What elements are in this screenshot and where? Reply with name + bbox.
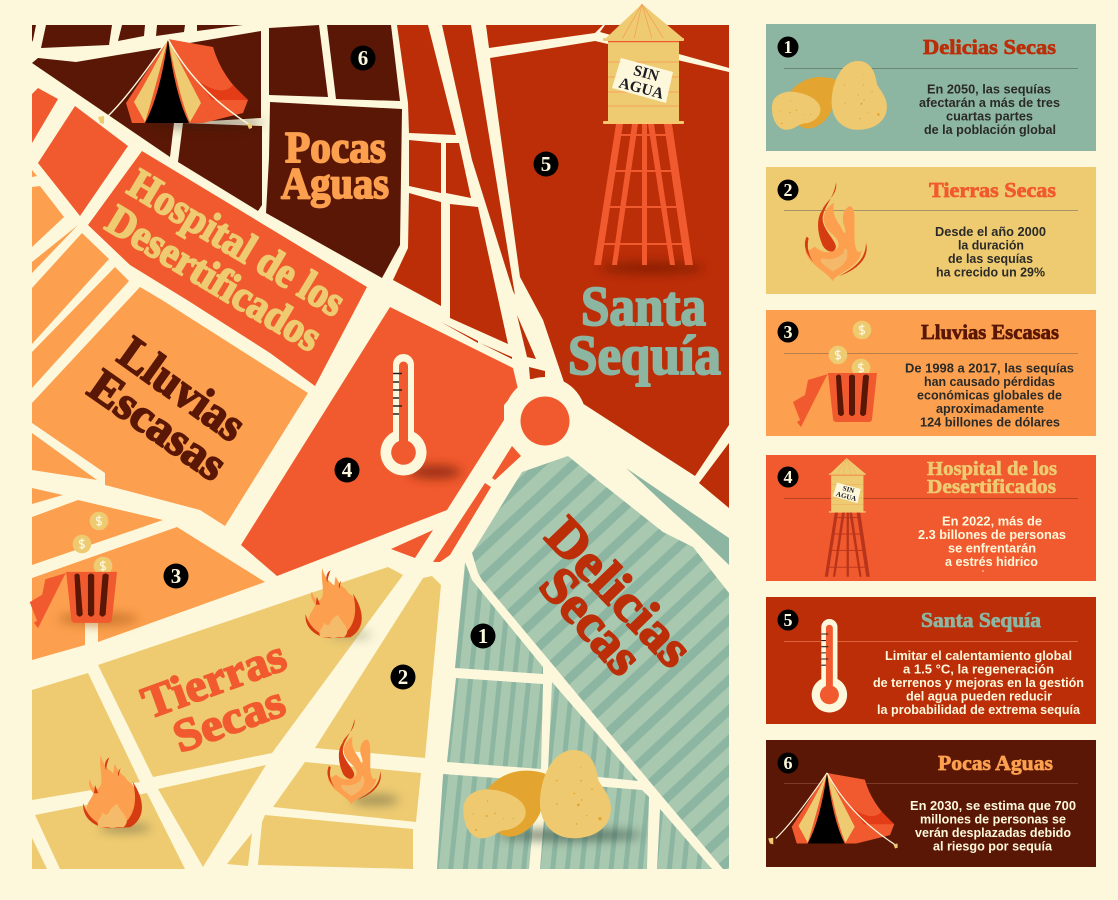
badge 1: [778, 36, 798, 58]
body text: de la población global: [924, 122, 1056, 137]
body text: De 1998 a 2017, las sequías: [905, 360, 1074, 376]
map title: Pocas Aguas: Aguas: [281, 159, 389, 208]
body text: se enfrentarán: [948, 540, 1036, 556]
body text: de las sequías: [948, 251, 1033, 266]
panel 1: Delicias Secas: [766, 24, 1096, 151]
panel 5: Santa Sequía: [766, 597, 1096, 724]
map: drought city districts: [30, 4, 729, 869]
body text: millones de personas se: [920, 812, 1066, 826]
district: Lluvias Escasas blocks: [32, 170, 308, 660]
badge 2: [778, 180, 798, 200]
body text: En 2050, las sequías: [927, 82, 1051, 96]
body text: a estrés hidrico: [945, 554, 1038, 569]
district: Tierras Secas blocks: [32, 567, 441, 869]
body text: [918, 514, 1066, 572]
body text: 2.3 billones de personas: [918, 527, 1066, 542]
body text: económicas globales de: [917, 388, 1062, 402]
map title: Delicias Secas: Secas: [528, 556, 653, 686]
map badge 5: [534, 152, 558, 176]
badge 6: [778, 752, 798, 774]
icon: potatoes: [772, 61, 887, 130]
district: Hospital de los Desertificados blocks: [32, 88, 521, 576]
body text: aproximadamente: [936, 401, 1044, 416]
badge 3: 3: [784, 322, 792, 342]
heading: Delicias Secas: [923, 35, 1056, 59]
badge 6: 6: [784, 753, 792, 773]
body text: [873, 648, 1084, 717]
icon: water tower: SIN: [842, 484, 855, 495]
map title: Pocas Aguas: Pocas: [285, 123, 386, 172]
body text: al riesgo por sequía: [933, 838, 1053, 854]
icon: flame centre: [327, 719, 399, 806]
badge 4: 4: [784, 467, 792, 487]
body text: [905, 360, 1074, 430]
panel 4: Hospital de los Desertificados: [766, 455, 1096, 581]
heading: Lluvias Escasas: [921, 320, 1059, 344]
map title: Santa Sequía: [568, 276, 721, 387]
district: Delicias Secas blocks: [437, 456, 729, 869]
icon: trash bin with coins on map: [30, 512, 138, 628]
icon: thermometer: [812, 619, 847, 713]
body text: afectarán a más de tres: [919, 95, 1060, 110]
map badge 4: 4: [342, 458, 353, 482]
icon: water tower: AGUA: [835, 490, 858, 503]
heading: Hospital de los: [927, 458, 1057, 480]
icon: water tower: SIN: [631, 62, 661, 85]
map badge 2: 2: [398, 665, 408, 689]
icon: water tower: AGUA: [617, 75, 666, 103]
body text: a 1.5 °C, la regeneración: [903, 662, 1054, 676]
map title: Tierras Secas: Secas: [166, 675, 291, 762]
badge 3: [778, 322, 798, 342]
map title: Lluvias Escasas: Escasas: [79, 359, 236, 491]
map badge 2: [390, 664, 416, 690]
body text: la duración: [958, 238, 1024, 252]
badge 2: 2: [784, 180, 792, 200]
heading: Pocas Aguas: [938, 751, 1053, 775]
icon: water tower: [825, 458, 870, 577]
map badge 3: 3: [171, 564, 181, 588]
map badge 6: [350, 46, 376, 70]
body text: verán desplazadas debido: [915, 825, 1071, 840]
badge 5: [778, 610, 798, 630]
badge 4: [778, 466, 798, 488]
district: Santa Sequía blocks: [393, 25, 729, 508]
body text: [910, 798, 1076, 854]
heading: Desertificados: [927, 476, 1056, 498]
map badge 6: 6: [358, 46, 368, 70]
map title: Lluvias Escasas: Lluvias: [109, 327, 255, 452]
icon: flame top: [305, 568, 372, 640]
body text: cuartas partes: [946, 108, 1033, 124]
body text: [935, 224, 1046, 280]
heading: Santa Sequía: [921, 608, 1042, 632]
panel 2: Tierras Secas: [766, 167, 1096, 294]
icon: tent: [768, 773, 898, 849]
icon: trash bin with coins: [793, 321, 877, 427]
map badge 4: [334, 458, 360, 482]
badge 1: 1: [784, 37, 792, 57]
map badge 1: [470, 624, 496, 648]
body text: ha crecido un 29%: [936, 264, 1045, 280]
body text: [919, 82, 1060, 137]
map title: Hospital de los Desertificados: Desertificados: [98, 196, 329, 361]
body text: del agua pueden reducir: [906, 688, 1052, 704]
body text: de terrenos y mejoras en la gestión: [873, 675, 1084, 690]
icon: flame lower left: [83, 755, 151, 833]
map title: Delicias Secas: Delicias: [534, 506, 704, 679]
body text: En 2030, se estima que 700: [910, 798, 1076, 813]
body text: la probabilidad de extrema sequía: [877, 702, 1081, 717]
body text: En 2022, más de: [942, 514, 1042, 528]
map title: Santa Sequía: Santa: [581, 276, 706, 338]
icon: tent on map: [98, 39, 263, 129]
panel 6: Pocas Aguas: [766, 740, 1096, 867]
map badge 3: [164, 564, 188, 588]
icon: flame: [805, 182, 867, 281]
heading: Tierras Secas: [929, 178, 1056, 202]
map title: Santa Sequía: Sequía: [568, 325, 721, 387]
icon: thermometer on map: [380, 354, 461, 479]
map badge 5: 5: [541, 152, 551, 176]
icon: potatoes on map: [463, 750, 642, 841]
roundabout: [504, 377, 586, 459]
badge 5: 5: [784, 610, 792, 630]
body text: Desde el año 2000: [935, 224, 1046, 239]
map title: Hospital de los Desertificados: Hospital de los: [120, 160, 353, 326]
map title: Pocas Aguas: [281, 123, 389, 208]
icon: water tower: [594, 4, 704, 274]
heading: [927, 458, 1057, 498]
body text: han causado pérdidas: [924, 374, 1055, 389]
district: Pocas Aguas blocks: [32, 25, 402, 278]
map title: Tierras Secas: Tierras: [135, 630, 292, 728]
body text: 124 billones de dólares: [920, 414, 1060, 430]
body text: Limitar el calentamiento global: [885, 648, 1072, 663]
map badge 1: 1: [478, 624, 488, 648]
panel 3: Lluvias Escasas: [766, 310, 1096, 436]
